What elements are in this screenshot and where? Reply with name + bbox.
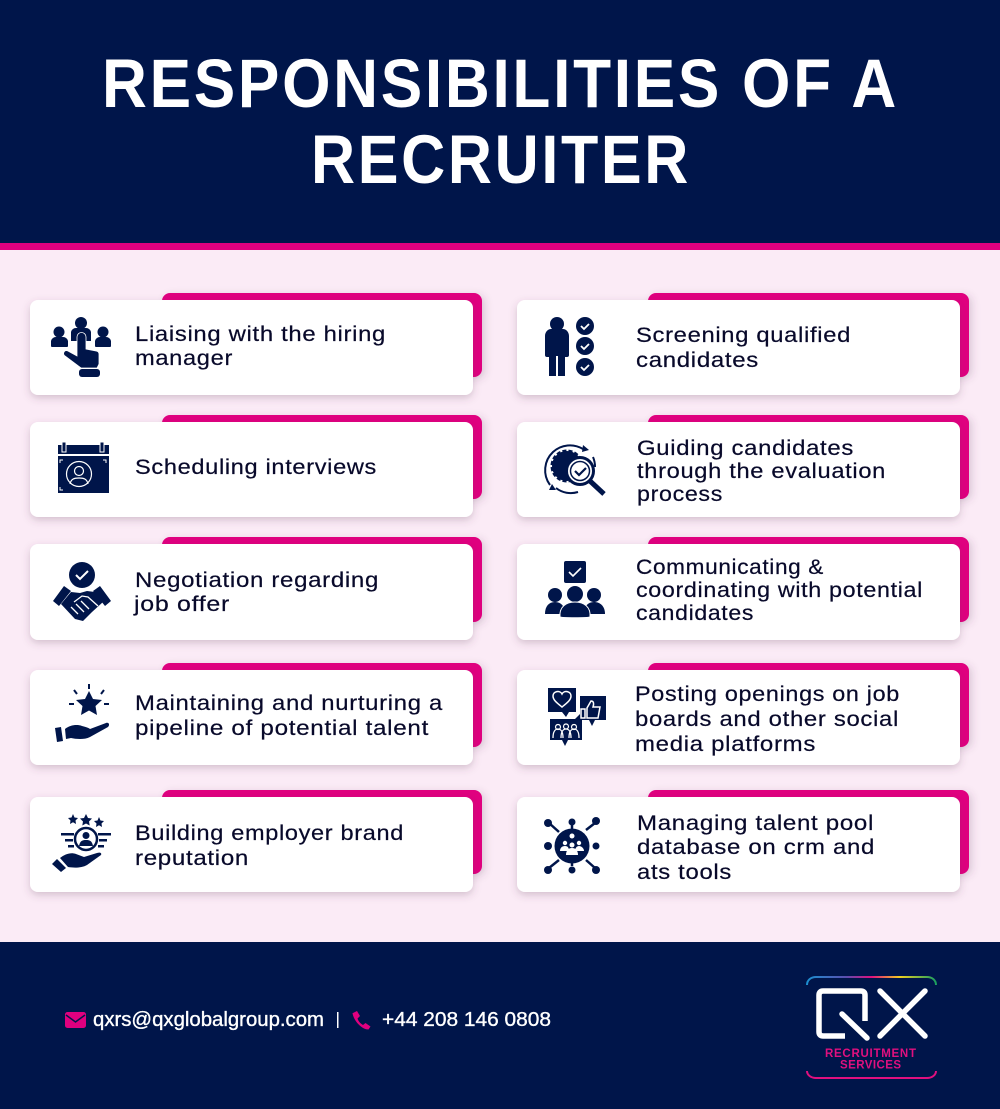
title [102,45,899,198]
card: maintaining pipeline: Maintaining and nurturing a [135,692,443,715]
card: managing talent pool: database on crm and [637,836,875,859]
icon: hand holding star [55,684,109,742]
contact line: +44 208 146 0808 [382,1009,551,1031]
card: communicating: candidates [636,602,754,625]
icon: calendar with interviewer [58,442,109,493]
card: posting openings: Posting openings on job [635,683,900,706]
card: scheduling interviews: Scheduling interviews [135,456,377,479]
card: guiding candidates: Guiding candidates [637,437,854,460]
card: negotiation: Negotiation regarding [135,569,379,592]
header band [0,0,1000,250]
card: negotiation: job offer [133,593,230,616]
card: employer brand: reputation [135,847,249,870]
icon: team with checkbox [545,561,605,618]
card: managing talent pool [517,790,969,892]
icon: social speech bubbles [548,688,606,746]
icon: hand selecting person [51,317,111,377]
card: employer brand: Building employer brand [135,822,404,845]
card: employer brand [30,790,482,892]
card: guiding candidates [517,415,969,517]
card: guiding candidates: process [637,483,723,506]
logo: QX Recruitment Services: SERVICES [840,1060,901,1072]
icon: gear with magnifier [545,445,604,494]
card: maintaining pipeline [30,663,482,765]
card: posting openings: boards and other social [635,708,899,731]
contact line [65,1009,551,1031]
card: liaising with the hiring manager [30,293,482,395]
card: liaising with the hiring manager: manager [135,347,233,370]
icon: hand with rated employee [52,814,111,872]
card: posting openings [517,663,969,765]
footer band [0,942,1000,1109]
card: managing talent pool: ats tools [637,861,732,884]
title: RESPONSIBILITIES OF A [102,45,899,122]
contact line: qxrs@qxglobalgroup.com [93,1009,324,1031]
card: managing talent pool: Managing talent pool [637,812,874,835]
card: scheduling interviews [30,415,482,517]
title: RECRUITER [311,121,691,198]
card: screening candidates [517,293,969,395]
card: screening candidates: Screening qualified [636,324,851,347]
card: communicating: coordinating with potential [636,579,923,602]
logo: QX Recruitment Services: RECRUITMENT [825,1048,916,1060]
card: maintaining pipeline: pipeline of potential talent [135,717,429,740]
icon: talent network [544,817,600,874]
logo: QX Recruitment Services [807,977,936,1078]
card: liaising with the hiring manager: Liaising with the hiring [135,323,386,346]
icon: handshake with check [53,562,111,621]
icon: person with checklist [545,317,594,376]
card: screening candidates: candidates [636,349,759,372]
card: communicating: Communicating & [636,556,824,579]
card: guiding candidates: through the evaluation [637,460,886,483]
card: communicating [517,537,969,640]
icon: phone [352,1011,370,1030]
card: posting openings: media platforms [635,733,816,756]
icon: email [65,1012,86,1028]
card: negotiation [30,537,482,640]
